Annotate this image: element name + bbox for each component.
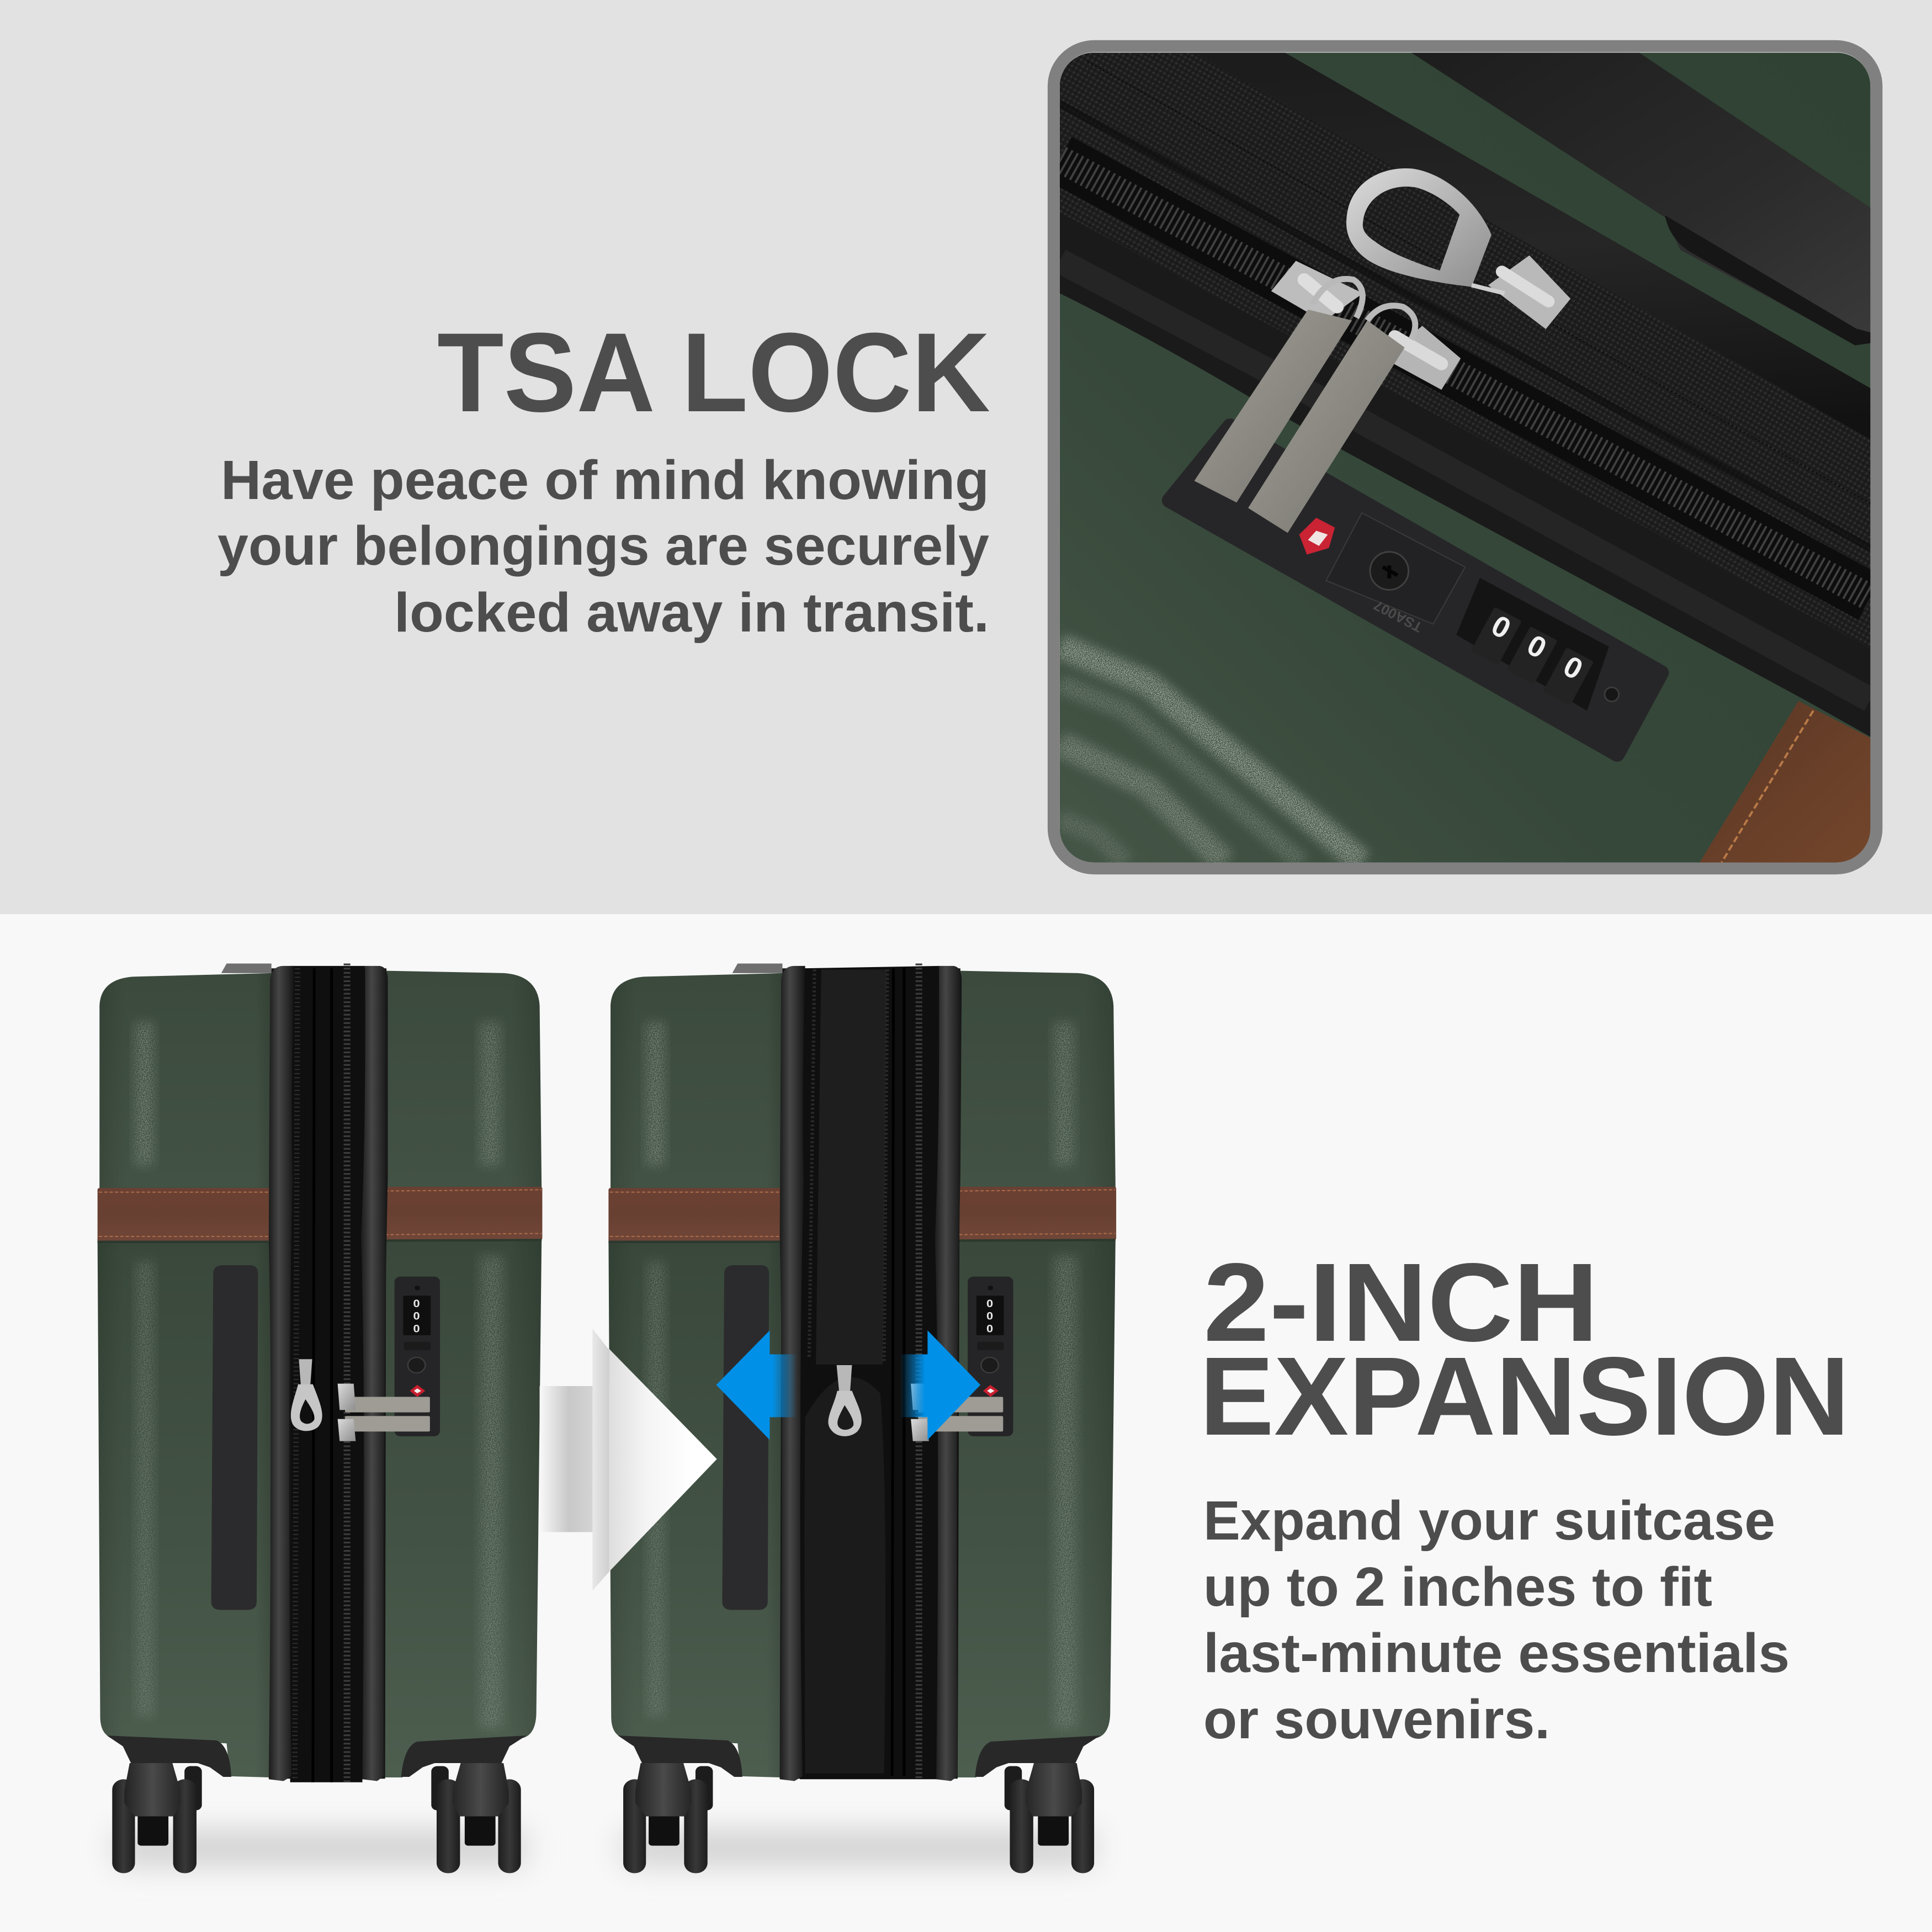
combination wheels: 0	[1486, 609, 1516, 645]
top handle nub	[221, 964, 272, 973]
zipper pull	[828, 1365, 862, 1436]
text block: expansion description	[1203, 1490, 1790, 1750]
lock plate	[1170, 426, 1661, 754]
wheels: front left	[112, 1763, 202, 1873]
heading: 2-INCH EXPANSION: 2-INCH	[1203, 1240, 1599, 1365]
top handle nub	[733, 964, 782, 973]
zipper fabric	[1060, 52, 1870, 649]
shell surface	[1060, 52, 1870, 862]
top rail	[1195, 52, 1870, 440]
wheels: right	[1005, 1763, 1094, 1873]
zipper pull	[291, 1359, 322, 1431]
TSA lock side view	[395, 1277, 440, 1436]
background: bottom section	[0, 914, 1932, 1932]
suitcase: unexpanded	[98, 964, 542, 1873]
combination wheels	[1456, 578, 1619, 711]
panel: TSA lock close-up photo	[1054, 46, 1876, 868]
combination wheels: 0	[1522, 629, 1552, 665]
arrow: blue right expansion	[900, 1330, 980, 1440]
heading: 2-INCH EXPANSION: EXPANSION	[1199, 1334, 1850, 1458]
zipper slider left	[1271, 261, 1363, 321]
wheels: front right	[431, 1763, 521, 1873]
key cylinder block	[1326, 513, 1465, 635]
text block: TSA lock description: your belongings are securely	[217, 515, 989, 577]
TSA lock side view	[968, 1277, 1013, 1436]
arrow: white transition arrow	[540, 1329, 717, 1591]
text block: expansion description: Expand your suitcase	[1203, 1490, 1775, 1552]
specular streaks	[1060, 646, 1362, 862]
zipper teeth	[1060, 159, 1870, 598]
text block: expansion description: up to 2 inches to fit	[1203, 1556, 1712, 1618]
zipper rails	[269, 966, 294, 1781]
text block: TSA lock description: locked away in transit.	[394, 582, 989, 644]
wheels: left	[623, 1763, 713, 1873]
heading: 2-INCH EXPANSION	[1199, 1240, 1850, 1458]
left shell	[98, 973, 273, 1777]
arrow: blue left expansion	[716, 1330, 797, 1440]
right shell	[956, 971, 1116, 1777]
lock pull bars	[338, 1384, 430, 1441]
combination wheels: 0	[1558, 650, 1588, 686]
expansion gusset fabric	[780, 964, 960, 1779]
left shell	[608, 973, 784, 1777]
brown leather strap	[1700, 701, 1870, 862]
suitcases illustration	[98, 964, 1116, 1873]
zipper rails	[780, 966, 805, 1781]
bottom rail	[1060, 212, 1870, 737]
metal pull bar one	[1195, 279, 1362, 502]
lock pull bars	[911, 1384, 1003, 1441]
TSA red diamond	[1299, 518, 1335, 555]
text block: TSA lock description	[217, 449, 989, 644]
text block: expansion description: or souvenirs.	[1203, 1689, 1550, 1750]
ground shadows	[116, 1830, 1093, 1866]
top handle	[1411, 52, 1870, 346]
centre zipper	[270, 964, 386, 1784]
heading: TSA LOCK: TSA LOCK	[437, 310, 990, 436]
background: top section	[0, 0, 1932, 914]
text block: TSA lock description: Have peace of mind knowing	[221, 449, 989, 511]
suitcase: expanded	[608, 964, 1116, 1873]
text block: expansion description: last-minute essentials	[1203, 1622, 1790, 1684]
metal pull bar two	[1248, 306, 1415, 533]
zipper slider right	[1384, 326, 1461, 390]
right shell	[383, 971, 542, 1777]
panel border	[1054, 46, 1876, 868]
zipper pull ring	[1346, 168, 1570, 329]
key cylinder block: TSA007	[1371, 597, 1425, 635]
